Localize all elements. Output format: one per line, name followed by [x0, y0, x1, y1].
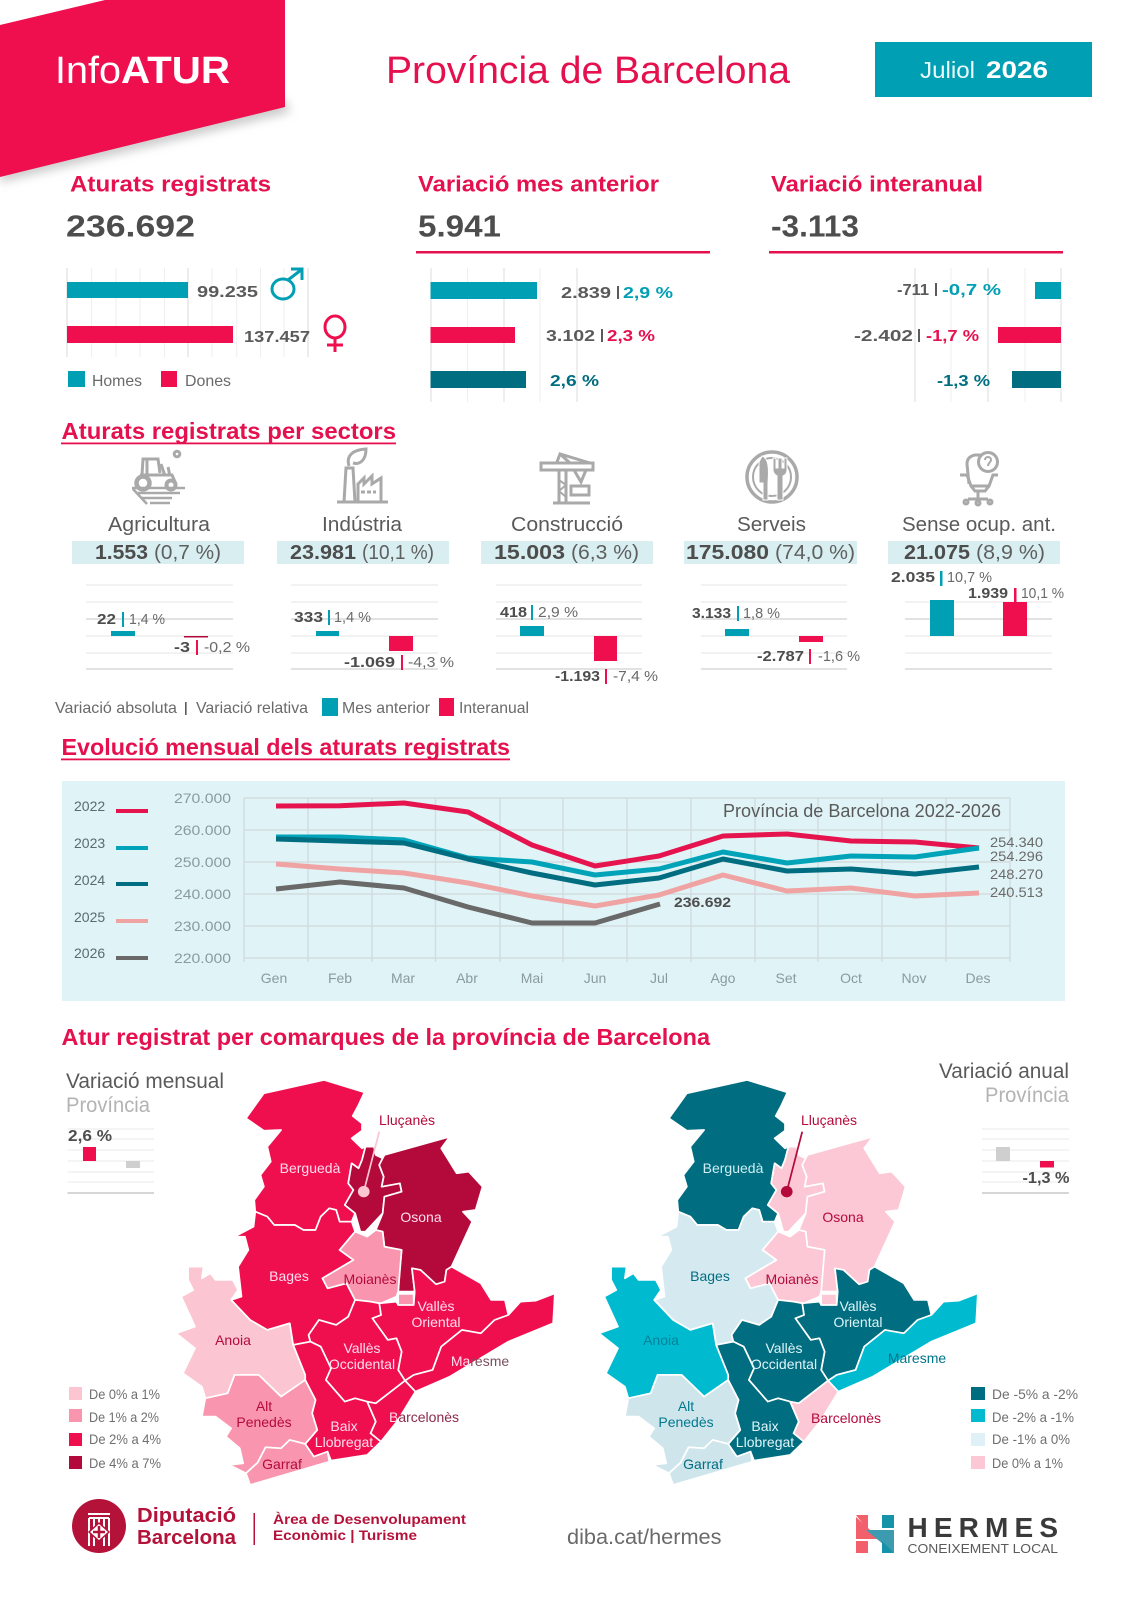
- sector total: 1.553: [95, 542, 148, 564]
- bar chart: monthly change: 3.102: [546, 328, 595, 345]
- legend: annual map: De -5% a -2%: [992, 1386, 1078, 1402]
- legend: monthly map: De 4% a 7%: [89, 1455, 161, 1471]
- mini bar chart: construcció: [496, 585, 658, 685]
- y axis labels: 240.000: [174, 886, 231, 902]
- map labels: monthly variation: Penedès: [236, 1414, 292, 1430]
- title: Província de Barcelona: [386, 50, 791, 92]
- map labels: annual variation: Maresme: [888, 1350, 946, 1366]
- map labels: monthly variation: Moianès: [344, 1271, 396, 1287]
- mini bar chart: construcció: 2,9 %: [538, 604, 578, 621]
- x axis labels: Nov: [902, 970, 926, 986]
- x axis labels: Jun: [584, 970, 606, 986]
- mini bar chart: province annual: [982, 1129, 1070, 1193]
- panel: variació anual: [599, 1060, 1078, 1485]
- sector name: Indústria: [322, 514, 403, 536]
- sector total: 15.003: [494, 542, 565, 564]
- panel: aturats registrats: [66, 172, 345, 390]
- series legend: 2022: [74, 798, 105, 814]
- series legend: 2023: [74, 835, 105, 851]
- mini bar chart: construcció: 418: [500, 604, 527, 621]
- sector total: (6,3 %): [571, 542, 639, 564]
- bar chart: gender: [67, 268, 310, 357]
- header banner with InfoATUR logo: [0, 0, 290, 182]
- x axis labels: Mar: [391, 970, 415, 986]
- map labels: annual variation: Bages: [690, 1268, 730, 1284]
- mini bar chart: serveis: 3.133: [692, 605, 731, 622]
- y axis labels: 220.000: [174, 950, 231, 966]
- monthly change figure: 5.941: [418, 208, 501, 244]
- footer: Hermes logo: HERMES: [908, 1512, 1058, 1543]
- legend: annual map: De 0% a 1%: [992, 1455, 1063, 1471]
- map labels: annual variation: Osona: [822, 1209, 864, 1225]
- sector total: 23.981: [290, 542, 356, 564]
- map labels: annual variation: Alt: [678, 1398, 694, 1414]
- panel: serveis: [684, 452, 860, 669]
- series legend: 2025: [74, 909, 105, 925]
- sector total: [684, 541, 857, 564]
- legend: sectors: Variació relativa: [196, 700, 308, 717]
- x axis labels: Des: [966, 970, 990, 986]
- map labels: monthly variation: Garraf: [262, 1456, 302, 1472]
- mini bar chart: agricultura: 1,4 %: [129, 611, 165, 628]
- map labels: annual variation: Vallès: [765, 1340, 803, 1356]
- total unemployed figure: 236.692: [66, 208, 195, 244]
- chart grid: [244, 798, 1010, 962]
- map labels: monthly variation: Llobregat: [315, 1434, 373, 1450]
- mini bar chart: indústria: 1,4 %: [334, 609, 371, 626]
- panel: variació interanual: [769, 172, 1063, 402]
- map labels: monthly variation: Berguedà: [280, 1160, 341, 1176]
- legend: gender: Dones: [185, 373, 231, 390]
- map labels: monthly variation: Bages: [269, 1268, 309, 1284]
- mini bar chart: indústria: [291, 585, 454, 671]
- line: 2022: [276, 803, 979, 866]
- y axis labels: 230.000: [174, 918, 231, 934]
- subtitle: variació anual: Variació anual: [939, 1060, 1069, 1083]
- footer: Hermes logo: [856, 1512, 1058, 1556]
- line end labels: 240.513: [990, 885, 1043, 900]
- sector total: (0,7 %): [154, 542, 221, 564]
- legend: sectors: Mes anterior: [342, 700, 431, 717]
- footer: Hermes logo: CONEIXEMENT LOCAL: [908, 1541, 1058, 1556]
- subtitle: província: Província: [66, 1094, 150, 1117]
- bar chart: annual change: -2.402: [854, 328, 913, 345]
- sector name: Serveis: [737, 514, 806, 536]
- map labels: monthly variation: Lluçanès: [379, 1112, 435, 1128]
- footer: Diputació Barcelona logo: Àrea de Desenvolupament: [273, 1511, 466, 1527]
- legend: gender: [68, 371, 231, 390]
- mini bar chart: construcció: -7,4 %: [613, 668, 658, 685]
- annual change figure: -3.113: [771, 208, 859, 244]
- line: 2023: [276, 837, 979, 875]
- x axis labels: Set: [775, 970, 797, 986]
- footer: Diputació Barcelona logo: [72, 1499, 466, 1553]
- map labels: annual variation: Penedès: [658, 1414, 714, 1430]
- map labels: monthly variation: Vallès: [417, 1298, 455, 1314]
- legend: monthly map: De 0% a 1%: [89, 1386, 160, 1402]
- map: monthly variation: [176, 1080, 555, 1485]
- mini bar chart: agricultura: 22: [97, 611, 116, 628]
- sector total: (74,0 %): [775, 542, 855, 564]
- bar chart: gender: 137.457: [244, 329, 310, 346]
- x axis labels: Abr: [456, 970, 478, 986]
- bar chart: monthly change: 2,9 %: [623, 285, 673, 302]
- mini bar chart: serveis: -2.787: [757, 648, 804, 665]
- icon: crane: [541, 454, 593, 503]
- sector total: [888, 541, 1060, 564]
- sector total: 175.080: [686, 542, 769, 564]
- mini bar chart: serveis: 1,8 %: [743, 605, 780, 622]
- sector name: Sense ocup. ant.: [902, 514, 1056, 536]
- sector name: Construcció: [511, 514, 623, 536]
- sector name: Agricultura: [108, 514, 211, 536]
- icon: plate and cutlery: [747, 452, 797, 502]
- mini bar chart: indústria: -4,3 %: [408, 654, 454, 671]
- map labels: annual variation: Oriental: [833, 1314, 883, 1330]
- bar chart: monthly change: 2,3 %: [607, 328, 655, 345]
- header banner with InfoATUR logo: ATUR: [121, 50, 230, 92]
- bar chart: monthly change: [430, 268, 673, 402]
- legend: gender: Homes: [92, 373, 142, 390]
- footer: Diputació Barcelona logo: Diputació: [137, 1505, 236, 1527]
- line: 2026: [276, 882, 660, 923]
- legend: sectors: Interanual: [459, 700, 529, 717]
- map labels: annual variation: [643, 1112, 946, 1472]
- legend: annual map: [971, 1386, 1078, 1471]
- footer: Diputació Barcelona logo: Econòmic | Turisme: [273, 1527, 417, 1543]
- map labels: annual variation: Occidental: [751, 1356, 817, 1372]
- mini bar chart: serveis: [692, 585, 860, 669]
- map labels: annual variation: Garraf: [683, 1456, 723, 1472]
- date badge: Juliol: [920, 57, 975, 83]
- map labels: monthly variation: Oriental: [411, 1314, 461, 1330]
- icon: tractor: [132, 451, 185, 504]
- x axis labels: Oct: [840, 970, 862, 986]
- map labels: monthly variation: Maresme: [451, 1353, 509, 1369]
- mini bar chart: sense ocupació anterior: 10,1 %: [1021, 585, 1064, 602]
- legend: monthly map: De 2% a 4%: [89, 1431, 161, 1447]
- y axis labels: 270.000: [174, 790, 231, 806]
- chart title: Província de Barcelona 2022-2026: [723, 801, 1001, 821]
- mini bar chart: indústria: 333: [294, 609, 323, 626]
- map labels: monthly variation: Barcelonès: [389, 1409, 459, 1425]
- x axis labels: Mai: [521, 970, 543, 986]
- legend: monthly map: [69, 1386, 161, 1471]
- footer: website: diba.cat/hermes: [567, 1526, 722, 1549]
- sector total: [277, 541, 449, 564]
- x axis labels: [261, 970, 990, 986]
- heading: aturats per sectors: Aturats registrats per sectors: [62, 418, 396, 444]
- panel: variació mensual: [66, 1070, 555, 1485]
- legend: monthly map: De 1% a 2%: [89, 1409, 159, 1425]
- map labels: annual variation: Vallès: [839, 1298, 877, 1314]
- line end labels: 254.340: [990, 835, 1043, 850]
- map labels: annual variation: Anoia: [643, 1332, 679, 1348]
- bar chart: monthly change: 2,6 %: [550, 373, 599, 390]
- line end labels: 248.270: [990, 867, 1043, 882]
- map labels: monthly variation: Baix: [330, 1418, 358, 1434]
- legend: annual map: De -1% a 0%: [992, 1431, 1070, 1447]
- legend: annual map: De -2% a -1%: [992, 1409, 1074, 1425]
- series legend: 2024: [74, 872, 105, 888]
- y axis labels: 250.000: [174, 854, 231, 870]
- map labels: monthly variation: Osona: [400, 1209, 442, 1225]
- map labels: annual variation: Berguedà: [703, 1160, 764, 1176]
- sector total: 21.075: [904, 542, 970, 564]
- mini bar chart: agricultura: [86, 585, 250, 669]
- icon: female symbol: [325, 316, 345, 352]
- mini bar chart: sense ocupació anterior: [891, 569, 1064, 669]
- panel: variació mes anterior: [416, 172, 710, 402]
- mini bar chart: province annual: -1,3 %: [1022, 1170, 1070, 1187]
- sector total: (8,9 %): [976, 542, 1045, 564]
- icon: male symbol: [272, 269, 302, 299]
- x axis labels: Jul: [650, 970, 668, 986]
- y axis labels: 260.000: [174, 822, 231, 838]
- icon: factory: [337, 449, 388, 502]
- header banner with InfoATUR logo: Info: [55, 50, 121, 92]
- sector total: [481, 541, 653, 564]
- map: annual variation: [599, 1080, 978, 1485]
- y axis labels: [174, 790, 231, 966]
- panel: indústria: [277, 449, 454, 671]
- date badge: 2026: [986, 57, 1048, 84]
- x axis labels: Ago: [711, 970, 736, 986]
- x axis labels: Feb: [328, 970, 352, 986]
- bar chart: annual change: -0,7 %: [942, 282, 1001, 299]
- heading: variació mes anterior: Variació mes anterior: [418, 172, 659, 196]
- series legend: [74, 798, 148, 961]
- map labels: monthly variation: Vallès: [343, 1340, 381, 1356]
- map labels: annual variation: Lluçanès: [801, 1112, 857, 1128]
- map labels: monthly variation: Occidental: [329, 1356, 395, 1372]
- panel: agricultura: [72, 451, 250, 669]
- mini bar chart: sense ocupació anterior: 2.035: [891, 569, 935, 586]
- mini bar chart: province monthly: [68, 1128, 154, 1193]
- mini bar chart: indústria: -1.069: [344, 654, 395, 671]
- series legend: 2026: [74, 945, 105, 961]
- heading: variació interanual: Variació interanual: [771, 172, 983, 196]
- line: 2024: [276, 839, 979, 885]
- icon: Hermes mark: [856, 1515, 894, 1553]
- bar chart: annual change: -711: [897, 282, 929, 299]
- icon: office chair with question mark: [960, 452, 998, 505]
- footer: Diputació Barcelona logo: Barcelona: [137, 1527, 237, 1549]
- map labels: monthly variation: [215, 1112, 509, 1472]
- x axis labels: Gen: [261, 970, 287, 986]
- panel: line chart: [62, 781, 1065, 1001]
- map labels: monthly variation: Alt: [256, 1398, 272, 1414]
- heading: comarques: Atur registrat per comarques de la província de Barcelona: [62, 1024, 710, 1050]
- bar chart: monthly change: 2.839: [561, 285, 611, 302]
- heading: evolució mensual: Evolució mensual dels aturats registrats: [62, 734, 510, 760]
- icon: Diputació emblem: [72, 1499, 126, 1553]
- legend: sectors: Variació absoluta: [55, 700, 177, 717]
- line end labels: 254.296: [990, 849, 1043, 864]
- heading: aturats registrats: Aturats registrats: [70, 172, 271, 196]
- panel: construcció: [481, 454, 658, 685]
- line end labels: 236.692: [674, 894, 731, 910]
- mini bar chart: province monthly: 2,6 %: [68, 1128, 112, 1145]
- map labels: annual variation: Barcelonès: [811, 1410, 881, 1426]
- mini bar chart: serveis: -1,6 %: [818, 648, 860, 665]
- mini bar chart: sense ocupació anterior: 1.939: [968, 585, 1008, 602]
- date badge: [875, 42, 1092, 97]
- map labels: annual variation: Moianès: [766, 1271, 818, 1287]
- legend: sectors: [55, 698, 529, 717]
- bar chart: annual change: -1,7 %: [926, 328, 979, 345]
- map labels: annual variation: Llobregat: [736, 1434, 794, 1450]
- mini bar chart: sense ocupació anterior: 10,7 %: [947, 569, 992, 586]
- sector total: [72, 541, 244, 564]
- sector total: (10,1 %): [362, 542, 434, 564]
- bar chart: gender: 99.235: [197, 284, 258, 301]
- line: 2025: [276, 864, 979, 906]
- subtitle: variació mensual: Variació mensual: [66, 1070, 224, 1093]
- bar chart: annual change: -1,3 %: [937, 373, 990, 390]
- bar chart: annual change: [854, 268, 1061, 402]
- mini bar chart: construcció: -1.193: [555, 668, 600, 685]
- map labels: monthly variation: Anoia: [215, 1332, 251, 1348]
- map labels: annual variation: Baix: [751, 1418, 779, 1434]
- subtitle: província: Província: [985, 1084, 1069, 1107]
- panel: sense ocupació anterior: [888, 452, 1064, 669]
- line end labels: [674, 835, 1043, 910]
- mini bar chart: agricultura: -0,2 %: [204, 639, 250, 656]
- mini bar chart: agricultura: -3: [174, 639, 190, 656]
